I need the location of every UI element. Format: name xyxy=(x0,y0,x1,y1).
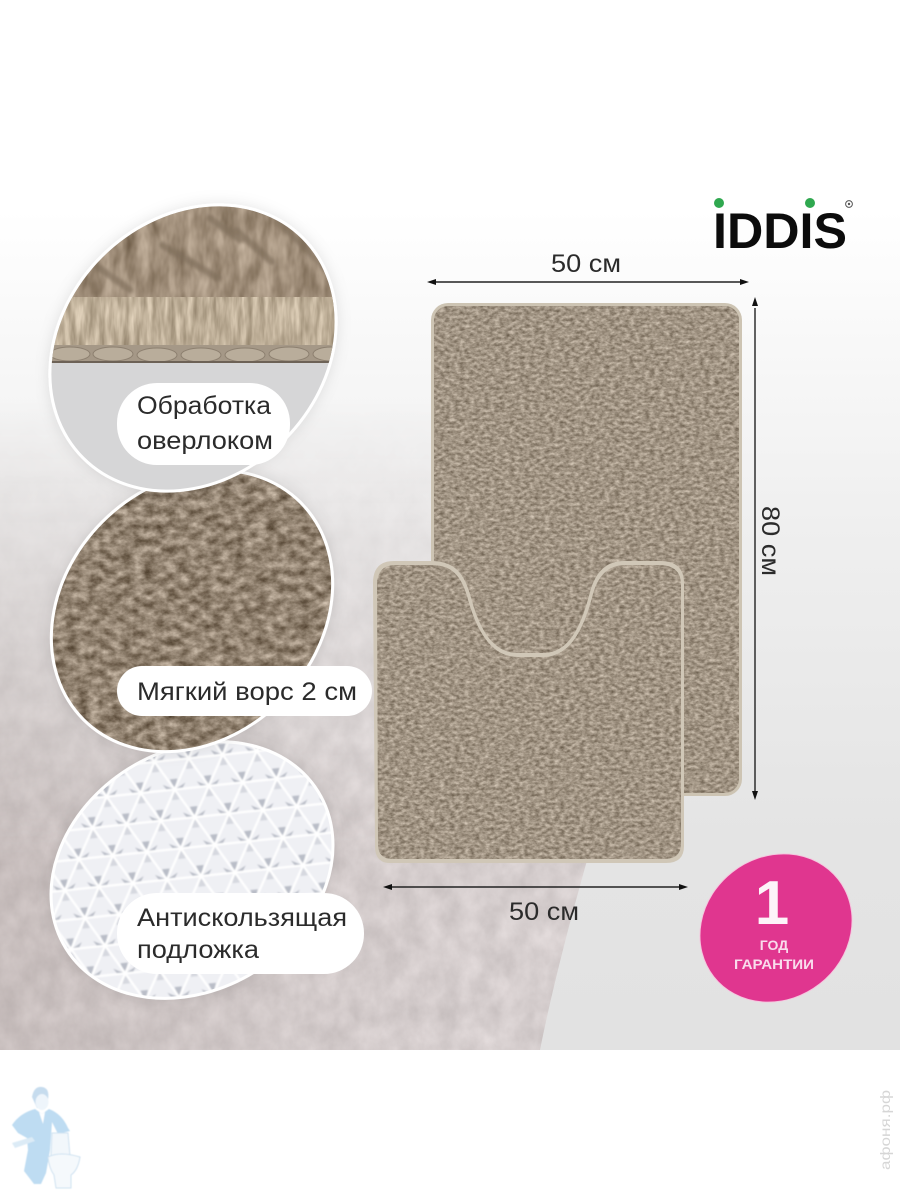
label: overlock edge: Обработка xyxy=(137,392,271,420)
label: soft pile: Мягкий ворс 2 см xyxy=(137,678,357,706)
label: anti-slip backing: подложка xyxy=(137,936,259,964)
warranty badge: ГАРАНТИИ xyxy=(734,956,814,972)
photo circle: soft pile xyxy=(48,470,336,756)
label: overlock edge: оверлоком xyxy=(137,427,273,455)
photo circle: anti-slip backing xyxy=(48,739,336,1002)
watermark: афоня.рф xyxy=(877,1090,893,1170)
background xyxy=(0,368,900,1050)
dimension: bottom width xyxy=(383,884,688,926)
label: anti-slip backing xyxy=(117,893,364,974)
logo: IDDIS: IDDIS xyxy=(713,203,847,259)
icon: plumber with toilet xyxy=(12,1087,80,1188)
dimension: top width: 50 см xyxy=(551,250,621,278)
label: anti-slip backing: Антискользящая xyxy=(137,904,347,932)
dimension: height: 80 см xyxy=(756,506,784,576)
warranty badge: 1 xyxy=(755,869,789,938)
warranty badge xyxy=(670,823,882,1033)
label: soft pile xyxy=(117,666,372,716)
dimension: height xyxy=(752,297,784,800)
dimension: top width xyxy=(427,250,749,285)
large rectangular mat xyxy=(431,303,742,796)
warranty badge: ГОД xyxy=(760,937,788,953)
contoured toilet mat xyxy=(373,560,685,864)
dimension: bottom width: 50 см xyxy=(509,898,579,926)
label: overlock edge xyxy=(117,383,290,465)
photo circle: overlock edge xyxy=(46,200,340,493)
